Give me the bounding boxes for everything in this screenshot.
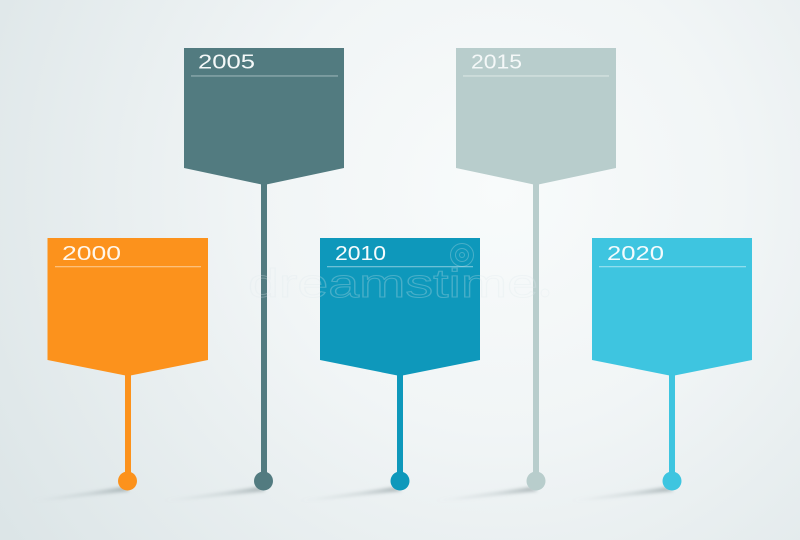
marker dot 2015 bbox=[526, 472, 546, 490]
stem 2000 bbox=[125, 370, 131, 475]
milestone 2000 bbox=[48, 238, 208, 490]
divider 2020 bbox=[599, 266, 746, 267]
panel 2010 bbox=[320, 238, 480, 376]
year 2015: 2015 bbox=[471, 52, 522, 74]
marker shadows bbox=[28, 487, 674, 501]
stem 2020 bbox=[669, 370, 675, 475]
watermark wordmark: dreamstime bbox=[248, 262, 538, 306]
year 2010: 2010 bbox=[335, 243, 386, 265]
marker dot 2020 bbox=[662, 472, 682, 490]
marker dot 2005 bbox=[254, 472, 273, 490]
divider 2010 bbox=[327, 266, 473, 267]
milestone 2005 bbox=[184, 48, 344, 490]
year 2000: 2000 bbox=[62, 243, 121, 265]
marker dot 2010 bbox=[390, 472, 410, 490]
divider 2000 bbox=[55, 266, 201, 267]
stem 2010 bbox=[397, 370, 403, 475]
watermark spiral icon bbox=[450, 244, 474, 266]
divider 2015 bbox=[463, 75, 609, 77]
panel 2020 bbox=[592, 238, 752, 376]
stem 2015 bbox=[533, 180, 539, 475]
divider 2005 bbox=[191, 75, 338, 77]
stem 2005 bbox=[261, 180, 267, 475]
milestone 2010 bbox=[320, 238, 480, 490]
panel 2005 bbox=[184, 48, 344, 185]
panel 2000 bbox=[48, 238, 208, 376]
watermark bbox=[248, 244, 549, 306]
marker dot 2000 bbox=[118, 472, 137, 490]
year 2020: 2020 bbox=[607, 243, 664, 265]
year 2005: 2005 bbox=[198, 52, 255, 74]
panel 2015 bbox=[456, 48, 616, 185]
watermark dot bbox=[541, 289, 549, 297]
milestone 2020 bbox=[592, 238, 752, 490]
milestone 2015 bbox=[456, 48, 616, 490]
